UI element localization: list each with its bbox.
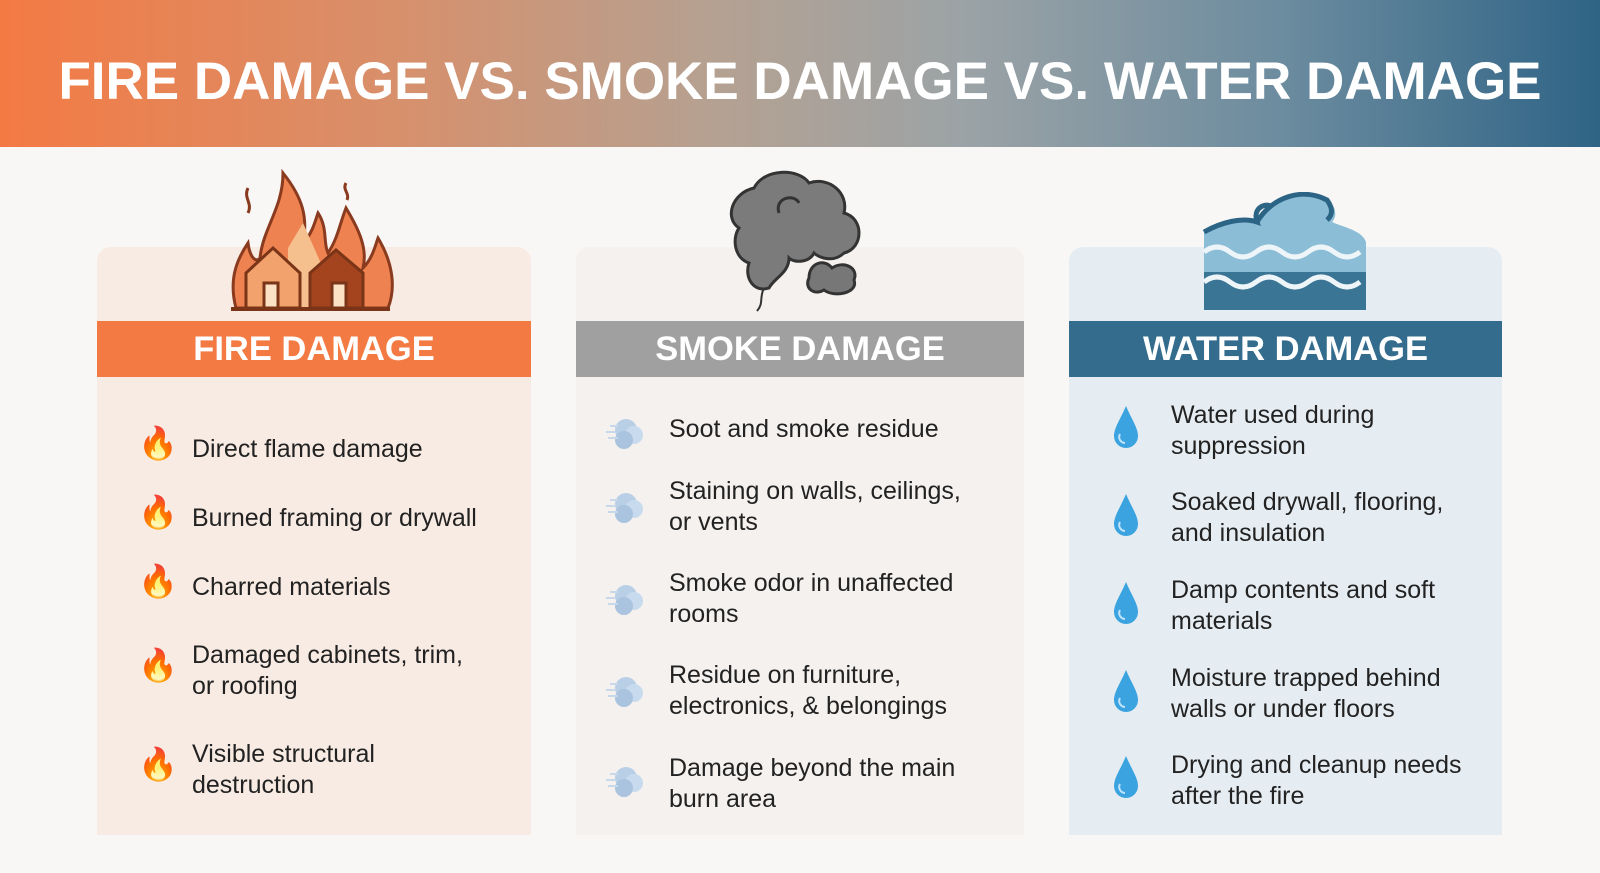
icon: smoke cloud: [730, 170, 860, 312]
fire list: 🔥: [138, 647, 178, 683]
water list: after the fire: [1171, 782, 1304, 810]
water list: Water used during: [1171, 401, 1374, 429]
fire list: Damaged cabinets, trim,: [192, 641, 463, 669]
smoke list: Damage beyond the main: [669, 754, 955, 782]
water list: Moisture trapped behind: [1171, 664, 1441, 692]
smoke list: Residue on furniture,: [669, 661, 901, 689]
water list: and insulation: [1171, 519, 1325, 547]
heading bar: water: [1069, 321, 1502, 377]
fire list: [138, 425, 477, 799]
smoke list: Smoke odor in unaffected: [669, 569, 953, 597]
fire list: Burned framing or drywall: [192, 504, 477, 532]
smoke list: [606, 415, 961, 813]
icon: burning houses: [231, 168, 394, 311]
heading bar: water: WATER DAMAGE: [1143, 330, 1428, 368]
smoke list: rooms: [669, 600, 738, 628]
icon: water wave: [1202, 192, 1366, 310]
fire list: 🔥: [138, 494, 178, 530]
fire list: Direct flame damage: [192, 435, 423, 463]
title: FIRE DAMAGE VS. SMOKE DAMAGE VS. WATER DAMAGE: [58, 52, 1542, 111]
water list: [1114, 401, 1461, 810]
smoke list: burn area: [669, 785, 776, 813]
header banner: [0, 0, 1600, 147]
fire list: 🔥: [138, 563, 178, 599]
fire list: 🔥: [138, 425, 178, 461]
fire list: destruction: [192, 771, 314, 799]
fire list: Visible structural: [192, 740, 375, 768]
water list: suppression: [1171, 432, 1306, 460]
smoke list: Staining on walls, ceilings,: [669, 477, 961, 505]
smoke list: electronics, & belongings: [669, 692, 947, 720]
water list: walls or under floors: [1171, 695, 1395, 723]
heading bar: smoke: [576, 321, 1024, 377]
heading bar: smoke: SMOKE DAMAGE: [655, 330, 945, 368]
smoke list: or vents: [669, 508, 758, 536]
water list: Damp contents and soft: [1171, 576, 1435, 604]
panel: smoke damage: [576, 247, 1024, 835]
fire list: 🔥: [138, 746, 178, 782]
heading bar: fire: FIRE DAMAGE: [193, 330, 435, 368]
heading bar: fire: [97, 321, 531, 377]
fire list: Charred materials: [192, 573, 391, 601]
water list: materials: [1171, 607, 1272, 635]
fire list: or roofing: [192, 672, 298, 700]
smoke list: Soot and smoke residue: [669, 415, 939, 443]
panel: water damage: [1069, 247, 1502, 835]
water list: Drying and cleanup needs: [1171, 751, 1461, 779]
water list: Soaked drywall, flooring,: [1171, 488, 1443, 516]
panel: fire damage: [97, 247, 531, 835]
